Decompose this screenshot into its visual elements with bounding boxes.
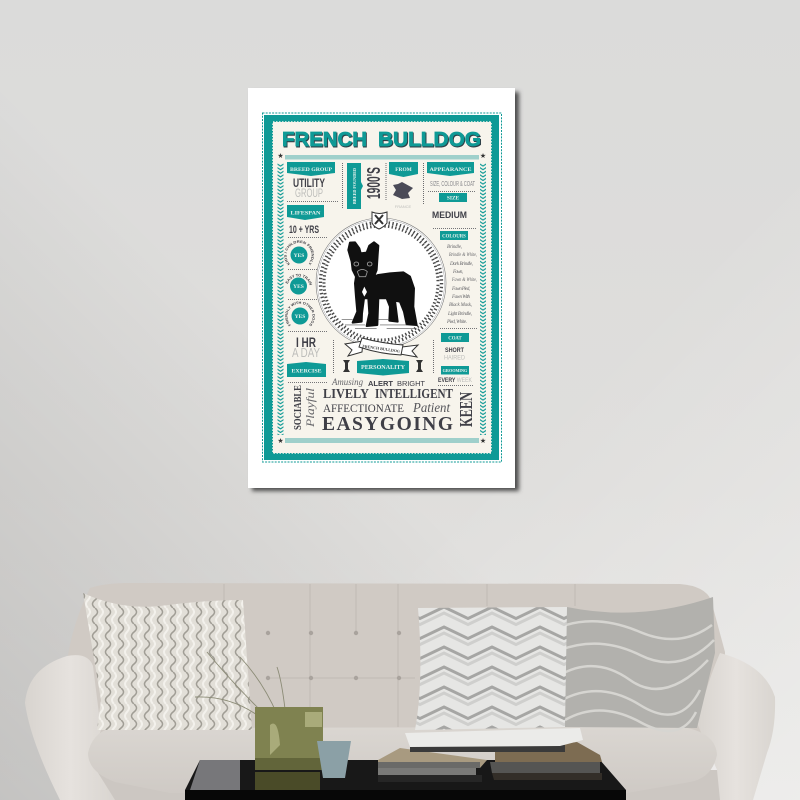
sofa reflection on table (190, 760, 240, 790)
right sofa arm (697, 653, 775, 800)
left sofa arm (25, 655, 115, 800)
grooming label: GROOMING (443, 368, 468, 373)
coat banner (441, 333, 469, 342)
a day: A DAY (292, 346, 321, 360)
plant stems (195, 652, 293, 767)
medallion white disc (316, 218, 446, 348)
cream inner panel (273, 122, 491, 453)
title shadow: FRENCH (283, 130, 368, 152)
vase highlight (270, 712, 322, 755)
badge word: YES (293, 284, 304, 290)
chest mark (362, 287, 367, 297)
breed founded label: BREED FOUNDED (352, 167, 357, 204)
personality panel (343, 359, 423, 376)
badge ring text: KIDS / CHILDREN FRIENDLY (284, 240, 314, 266)
french bulldog (342, 242, 417, 328)
from panel (389, 162, 418, 209)
ribbon left tail (345, 341, 363, 356)
corner star bottom right: ★ (480, 437, 486, 445)
intelligent: INTELLIGENT (375, 386, 453, 401)
lively: LIVELY (323, 386, 369, 401)
sofa (25, 583, 775, 800)
lifespan label: LIFESPAN (290, 210, 321, 216)
affectionate: AFFECTIONATE (323, 401, 404, 415)
title (282, 129, 482, 152)
group: GROUP (295, 186, 323, 200)
sofa back (68, 583, 725, 745)
colours panel (440, 231, 477, 325)
from banner (389, 162, 418, 177)
corner star bottom left: ★ (277, 437, 284, 445)
colours list: Fawn & White, (451, 278, 477, 283)
colours list: Black Mask, (449, 303, 472, 308)
personality banner (357, 359, 409, 376)
yes badge: family friendly (284, 240, 314, 266)
size banner (439, 193, 467, 202)
white canvas (248, 88, 515, 488)
badge ring text: FRIENDLY WITH OTHER DOGS (285, 302, 315, 326)
colours list: Brindle & White, (449, 253, 477, 258)
bright: BRIGHT (397, 379, 425, 388)
breed group label: BREED GROUP (290, 167, 333, 173)
left chevron column (278, 163, 284, 435)
exercise banner (287, 362, 326, 377)
colours list (446, 245, 477, 325)
sofa lower front (78, 770, 738, 800)
title second word: BULLDOG (378, 129, 481, 151)
colours list: Dark Brindle, (449, 262, 473, 267)
sofa seat (88, 727, 717, 793)
medallion (316, 212, 446, 357)
vase base (255, 758, 323, 770)
france label: FRANCE (395, 204, 412, 209)
coat label: COAT (448, 336, 463, 342)
corner star top left: ★ (277, 152, 284, 160)
colours list: Pied, White. (446, 320, 467, 325)
lifespan value: 10 + YRS (289, 224, 319, 236)
poster (248, 88, 515, 488)
ribbon centre (359, 338, 403, 355)
right pillow (557, 597, 715, 728)
right chevron column (480, 163, 486, 435)
colours list: Brindle, (447, 245, 462, 250)
colours list: Light Brindle, (447, 312, 472, 317)
teal frame (264, 115, 499, 460)
amusing: Amusing (331, 377, 363, 387)
lifespan panel (287, 205, 324, 236)
badge word: YES (294, 253, 304, 259)
ribbon (345, 338, 418, 357)
badge word: YES (295, 314, 305, 320)
from label: FROM (395, 167, 412, 173)
breed founded banner (347, 163, 363, 209)
left pillow (83, 593, 252, 730)
badge ring text: EASY TO TRAIN (285, 274, 312, 286)
medallion thin ring (317, 219, 445, 347)
corner star top right: ★ (480, 152, 486, 160)
patient: Patient (412, 401, 451, 416)
book stack (378, 728, 602, 782)
personality word cloud (293, 377, 476, 435)
exercise panel (287, 335, 326, 377)
colours list: Fawn, (452, 270, 463, 275)
ribbon right tail (400, 345, 418, 357)
short: SHORT (445, 347, 464, 354)
sociable: SOCIABLE (293, 385, 304, 430)
appearance label: APPEARANCE (430, 167, 472, 173)
muzzle (357, 269, 367, 277)
grooming banner (441, 366, 469, 374)
colours label: COLOURS (442, 234, 466, 240)
title shadow second word: BULLDOG (379, 130, 482, 152)
every week: EVERY WEEK (438, 377, 473, 384)
personality label: PERSONALITY (361, 365, 406, 371)
appearance banner (427, 162, 474, 176)
lifespan banner (287, 205, 324, 220)
appearance subtitle: SIZE, COLOUR & COAT (430, 181, 475, 188)
crossed bones on shield (375, 215, 383, 224)
dashed outer frame (262, 113, 502, 462)
title first word: FRENCH (282, 129, 367, 151)
glass vase (255, 707, 323, 770)
colours list: Fawn With (451, 295, 470, 300)
poster shadow (252, 92, 519, 491)
alert: ALERT (368, 379, 393, 388)
coat panel (441, 333, 469, 362)
easygoing: EASYGOING (322, 414, 453, 435)
haired: HAIRED (444, 354, 465, 362)
breed founded panel (347, 163, 384, 209)
yes badge: easy to train (285, 274, 312, 294)
yes badge: friendly with other dogs (285, 302, 315, 326)
bone icon right (416, 360, 423, 372)
laurel leaves outer (320, 222, 442, 344)
founded year: 1900'S (364, 167, 384, 199)
breed group panel (287, 162, 335, 200)
shield (372, 212, 387, 229)
one hour: I HR (296, 335, 316, 350)
medium: MEDIUM (432, 210, 467, 221)
drinking glass (317, 741, 351, 778)
exercise label: EXERCISE (292, 368, 322, 374)
vase reflection (255, 772, 320, 790)
bone icon left (343, 360, 350, 372)
eyes (354, 262, 372, 266)
colours list: Fawn Pied, (451, 287, 470, 292)
bottom stripe bar (285, 438, 479, 443)
france map (393, 182, 413, 199)
keen: KEEN (456, 392, 476, 427)
sofa seams and tufting (224, 584, 575, 727)
laurel leaves inner (324, 226, 438, 340)
size label: SIZE (447, 196, 460, 202)
ribbon label: FRENCH BULLDOG (362, 343, 400, 354)
breed group banner (287, 162, 335, 176)
coffee table front edge (185, 790, 626, 800)
middle pillow (415, 607, 567, 730)
ground lines (342, 319, 417, 328)
utility: UTILITY (293, 178, 325, 190)
colours banner (440, 231, 468, 240)
coffee table (185, 760, 626, 800)
right pillow wave pattern (560, 621, 714, 731)
appearance panel (427, 162, 475, 221)
playful: Playful (303, 387, 317, 428)
grooming panel (438, 366, 473, 384)
top stripe bar (285, 155, 479, 160)
